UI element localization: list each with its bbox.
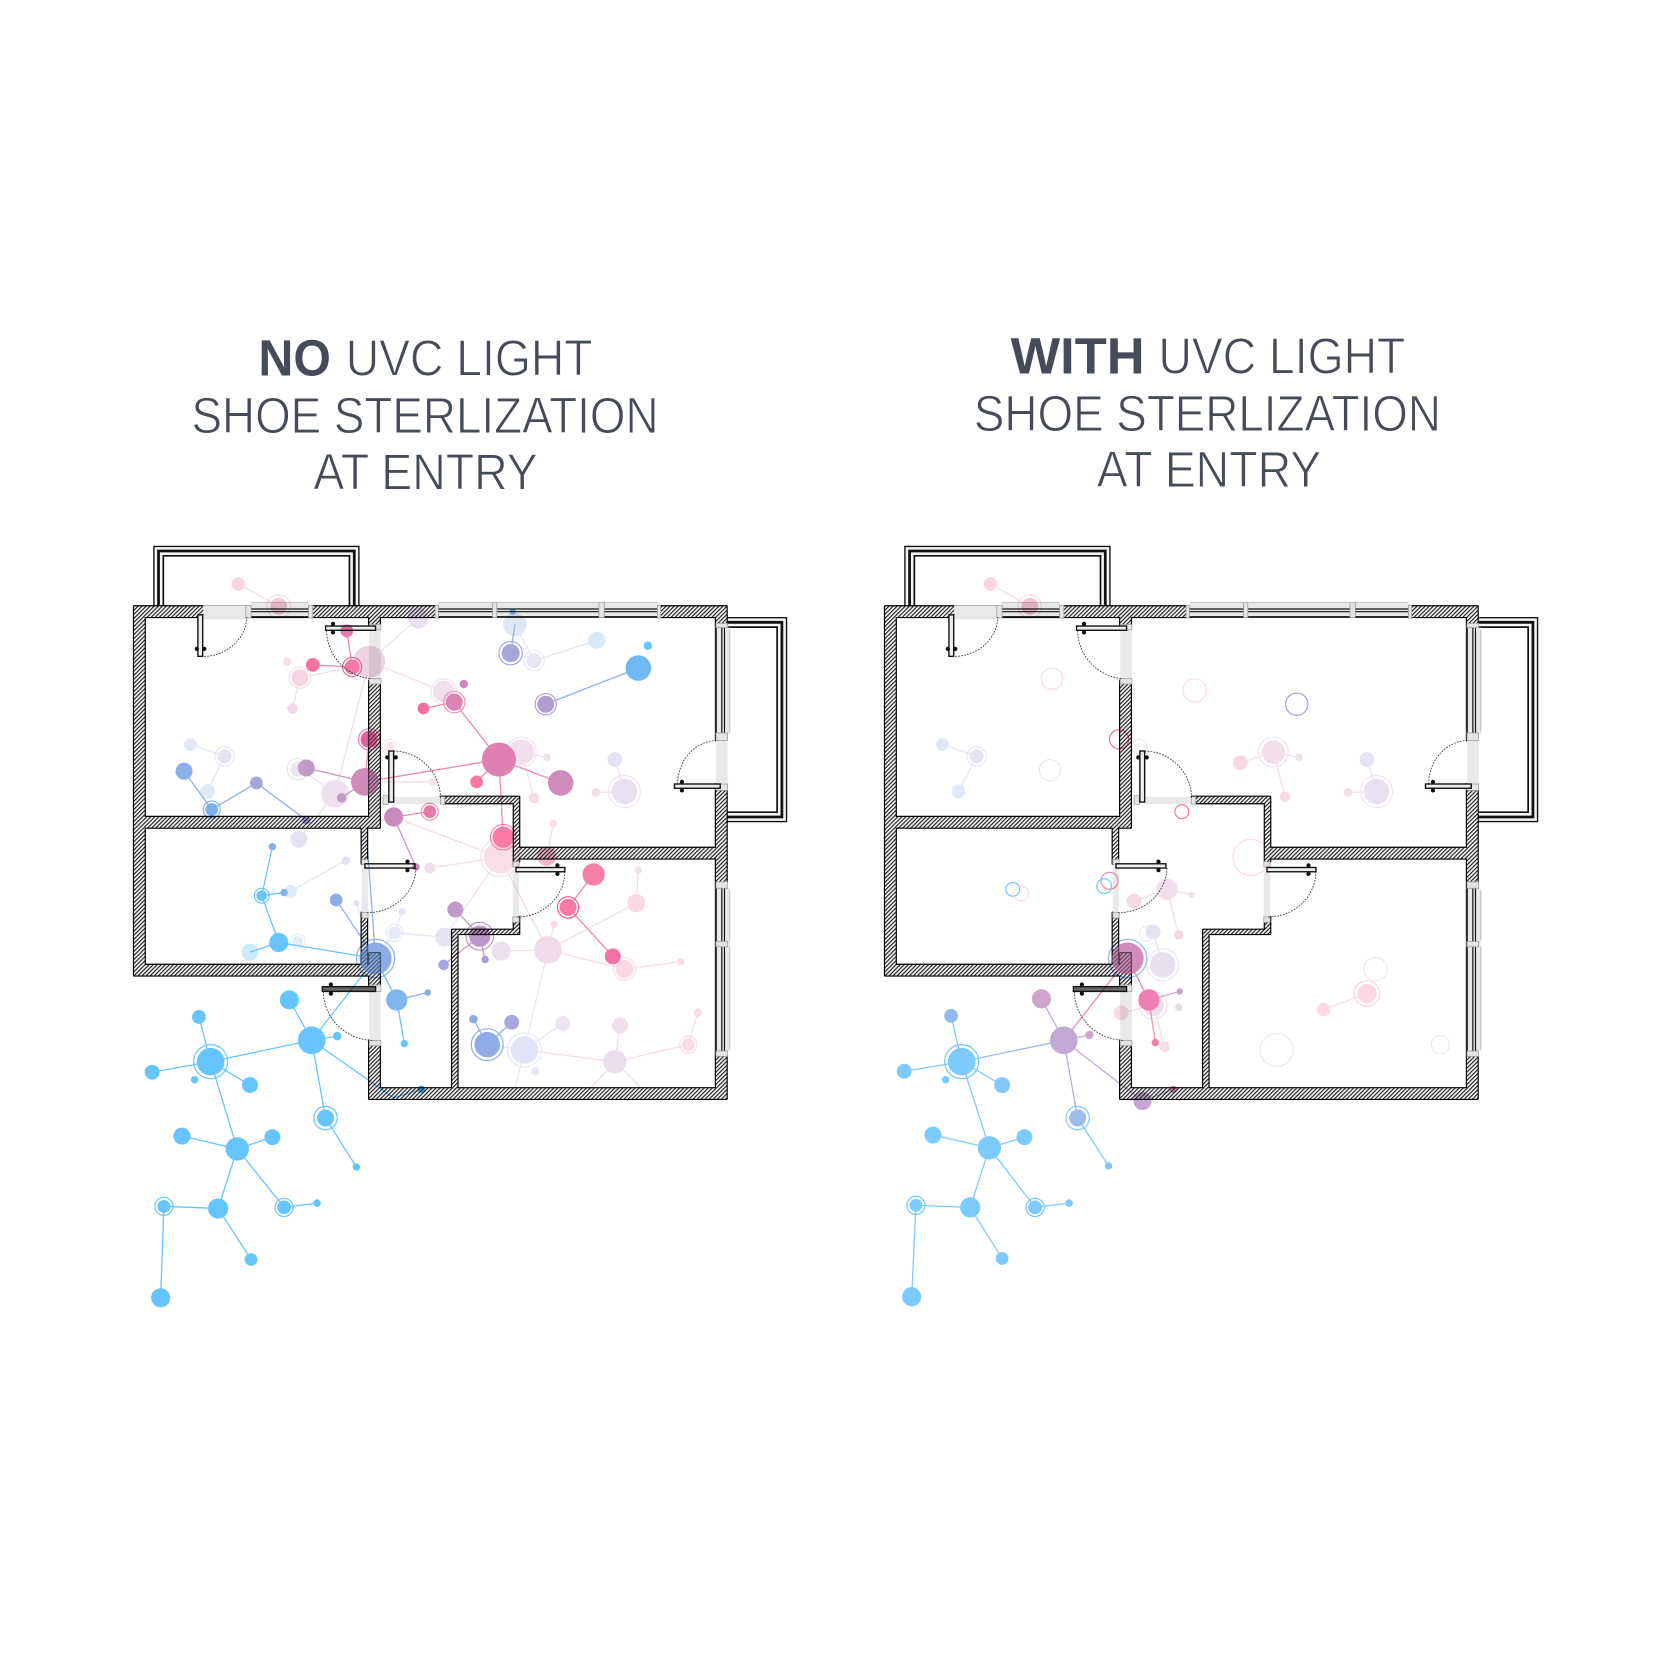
germ network: left plan, heavy contamination (145, 577, 702, 1307)
sky blue tracked-in tree (145, 847, 431, 1307)
title: with UVC light: WITH (1011, 327, 1145, 384)
title: no UVC light (192, 330, 659, 500)
floor plan: left apartment (134, 551, 782, 1099)
pale background cluster (184, 577, 702, 1088)
title: no UVC light: NO (259, 330, 331, 387)
title: with UVC light: AT ENTRY (1097, 441, 1321, 498)
entry-blocked tree (897, 939, 1183, 1306)
title: with UVC light: SHOE STERLIZATION (974, 385, 1441, 442)
tint overlay: nodes crossing walls (351, 731, 1144, 974)
germ network: right plan, reduced contamination (897, 577, 1449, 1306)
empty rings: neutralised germs (1006, 668, 1449, 1066)
title: no UVC light: AT ENTRY (313, 443, 538, 500)
saturated pink cluster (298, 624, 621, 970)
floor plan: right apartment (885, 551, 1533, 1099)
title: with UVC light: UVC LIGHT (1158, 327, 1405, 384)
title: no UVC light: SHOE STERLIZATION (192, 387, 659, 444)
title: no UVC light: UVC LIGHT (346, 330, 593, 387)
title: with UVC light (974, 327, 1441, 498)
residual pale clusters (936, 577, 1393, 1052)
blue and violet cluster (176, 608, 652, 1061)
